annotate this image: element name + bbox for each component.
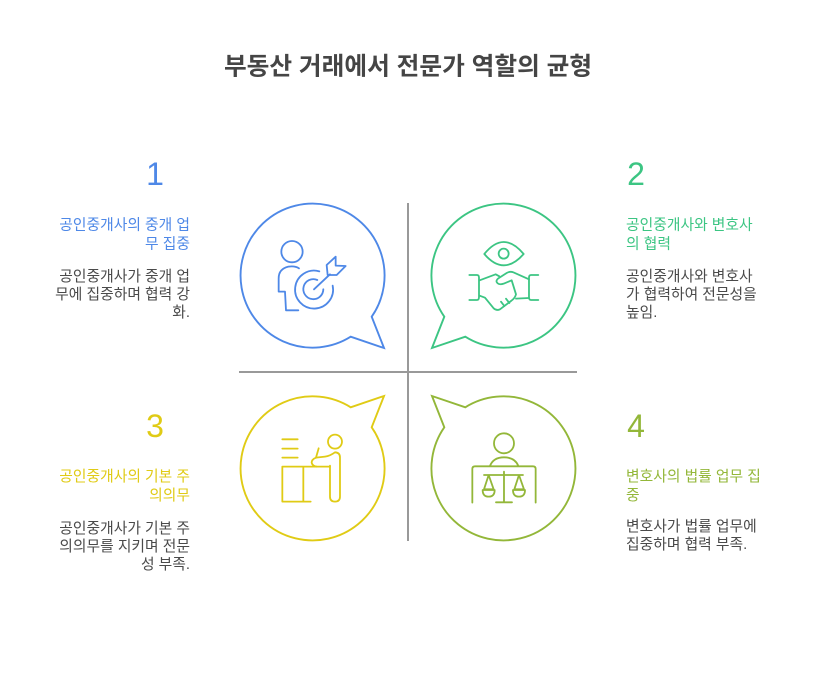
description 4: 변호사가 법률 업무에 <box>626 518 757 535</box>
heading 2: 의 협력 <box>626 236 671 252</box>
icon: lawyer with scales of justice <box>472 433 536 503</box>
heading 4: 변호사의 법률 업무 집 <box>626 468 761 485</box>
description 1: 화. <box>172 304 190 321</box>
heading 4: 중 <box>626 488 640 504</box>
description 3: 성 부족. <box>141 556 190 573</box>
icon: person writing at desk <box>282 435 342 502</box>
heading 1: 무 집중 <box>145 236 190 252</box>
description 2: 공인중개사와 변호사 <box>626 268 753 285</box>
description 1: 무에 집중하며 협력 강 <box>55 286 190 303</box>
heading 1: 공인중개사의 중개 업 <box>59 216 190 234</box>
description 1: 공인중개사가 중개 업 <box>59 268 190 285</box>
speech bubble 2 <box>431 204 575 348</box>
speech bubble 4 <box>431 396 575 540</box>
description 2: 높임. <box>626 304 657 321</box>
heading 2: 공인중개사와 변호사 <box>626 216 753 234</box>
heading 3: 의의무 <box>149 487 190 504</box>
quadrant divider: vertical axis <box>407 203 409 541</box>
text block 1 <box>55 156 190 321</box>
description 2: 가 협력하여 전문성을 <box>626 286 757 303</box>
icon: person with target and arrow <box>279 241 346 310</box>
description 4: 집중하며 협력 부족. <box>626 536 747 553</box>
quadrant divider: horizontal axis <box>239 371 577 373</box>
number 3: 3 <box>146 408 164 444</box>
number 1: 1 <box>146 156 164 192</box>
speech bubble 3 <box>241 396 385 540</box>
text block 2 <box>626 156 757 321</box>
number 4: 4 <box>627 408 645 444</box>
speech bubble 1 <box>241 204 385 348</box>
icon: eye above handshake <box>469 242 538 310</box>
heading 3: 공인중개사의 기본 주 <box>59 468 190 485</box>
number 2: 2 <box>627 156 645 192</box>
description 3: 의의무를 지키며 전문 <box>59 538 190 555</box>
text block 4 <box>626 408 761 553</box>
text block 3 <box>59 408 190 573</box>
description 3: 공인중개사가 기본 주 <box>59 520 190 537</box>
title: 부동산 거래에서 전문가 역할의 균형 <box>224 52 592 80</box>
